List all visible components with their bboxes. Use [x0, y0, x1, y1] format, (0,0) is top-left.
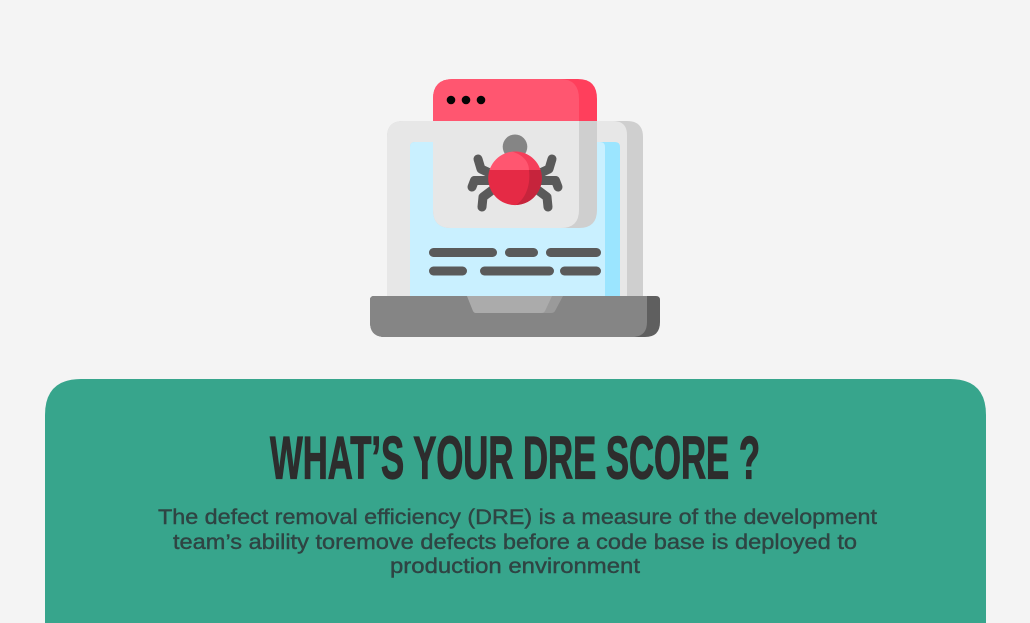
description text: production environment	[390, 554, 640, 578]
infographic canvas	[45, 79, 986, 623]
description text: The defect removal efficiency (DRE) is a measure of the development	[158, 505, 877, 529]
panel background	[45, 379, 986, 623]
icon: bug	[472, 134, 558, 207]
text lines on screen	[429, 248, 601, 276]
icon: laptop with bug window	[370, 79, 660, 337]
laptop screen frame	[387, 121, 643, 297]
laptop base	[370, 296, 660, 337]
description text: team’s ability toremove defects before a code base is deployed to	[173, 530, 857, 554]
description text	[158, 505, 877, 578]
screen display	[410, 142, 620, 297]
panel: DRE score	[45, 379, 986, 623]
bug window	[433, 79, 597, 228]
